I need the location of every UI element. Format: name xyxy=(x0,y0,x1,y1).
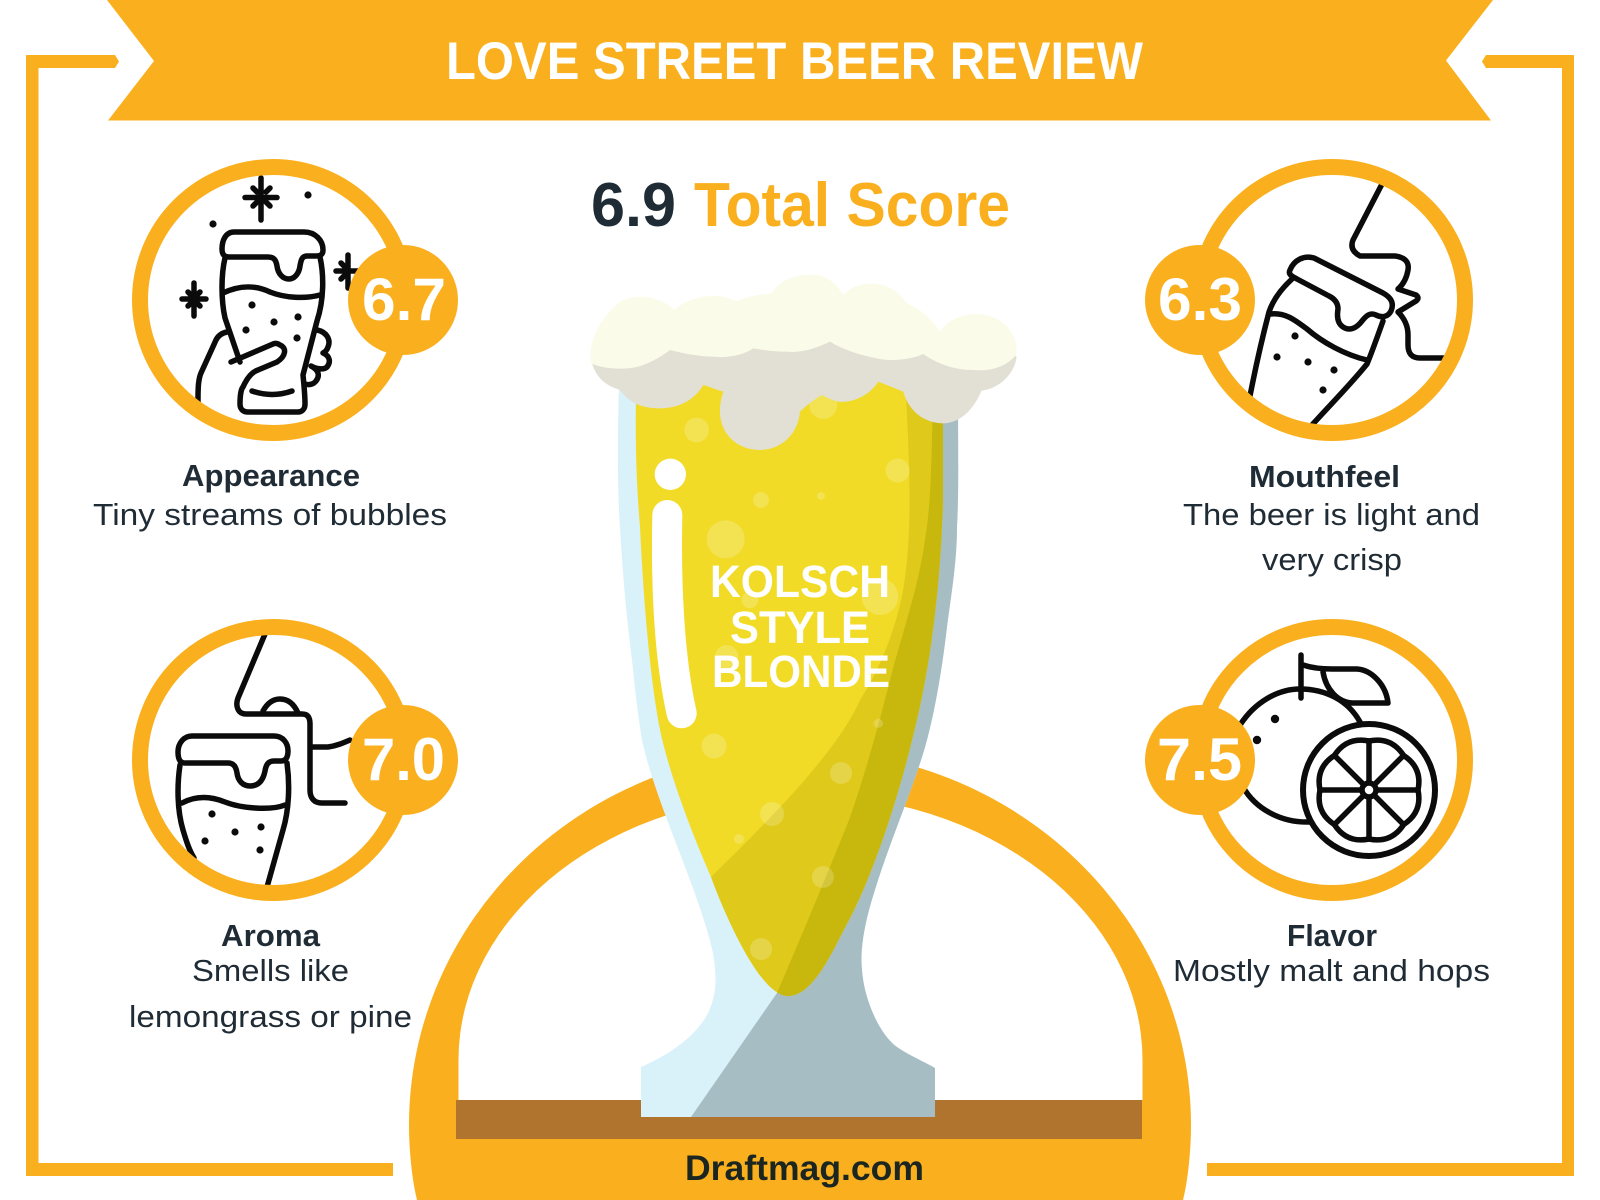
glass stem and bowl xyxy=(618,385,958,1117)
beer style label: STYLE xyxy=(730,602,870,653)
caption: Mostly malt and hops xyxy=(1173,953,1490,988)
icon ring xyxy=(1199,627,1465,893)
icon: glass under nose xyxy=(178,634,350,887)
score badge xyxy=(348,245,458,355)
caption: The beer is light and xyxy=(1183,497,1480,532)
score badge xyxy=(1145,245,1255,355)
score badge xyxy=(1145,705,1255,815)
caption xyxy=(1183,459,1480,577)
icon: beer glass in hand with sparkles xyxy=(182,178,370,412)
score badge: 6.3 xyxy=(1158,266,1242,333)
caption xyxy=(93,458,447,532)
beer in glass xyxy=(636,382,943,996)
caption: Mouthfeel xyxy=(1249,459,1400,494)
highlight xyxy=(655,459,686,713)
caption: lemongrass or pine xyxy=(129,999,412,1034)
beer foam xyxy=(591,275,1017,450)
caption: Flavor xyxy=(1287,918,1377,953)
caption xyxy=(129,918,412,1034)
panel: aroma xyxy=(129,627,458,1034)
title: LOVE STREET BEER REVIEW xyxy=(446,32,1143,91)
score badge: 7.0 xyxy=(362,726,445,793)
score badge xyxy=(348,705,458,815)
score badge: 7.5 xyxy=(1157,726,1242,793)
total score heading: Total Score xyxy=(694,171,1010,240)
beer style label: KOLSCH xyxy=(710,556,890,607)
panel: flavor xyxy=(1145,627,1490,988)
score badge: 6.7 xyxy=(362,266,446,333)
bubbles xyxy=(684,391,910,960)
beer style label xyxy=(710,556,890,697)
icon ring xyxy=(140,627,406,893)
caption: Tiny streams of bubbles xyxy=(93,497,447,532)
caption: very crisp xyxy=(1262,542,1402,577)
total score heading: 6.9 xyxy=(591,171,676,240)
icon: citrus fruit and slice xyxy=(1240,655,1435,856)
panel: mouthfeel xyxy=(1145,167,1480,577)
source credit: Draftmag.com xyxy=(685,1149,924,1188)
panel: appearance xyxy=(93,167,458,532)
arch behind glass xyxy=(409,750,1191,1200)
icon ring xyxy=(1199,167,1465,433)
beer style label: BLONDE xyxy=(712,646,890,697)
icon ring xyxy=(140,167,406,433)
caption: Aroma xyxy=(221,918,321,953)
caption: Smells like xyxy=(192,953,349,988)
caption: Appearance xyxy=(182,458,360,493)
icon: glass at lips xyxy=(1250,184,1445,425)
caption xyxy=(1173,918,1490,988)
title banner xyxy=(107,0,1493,120)
